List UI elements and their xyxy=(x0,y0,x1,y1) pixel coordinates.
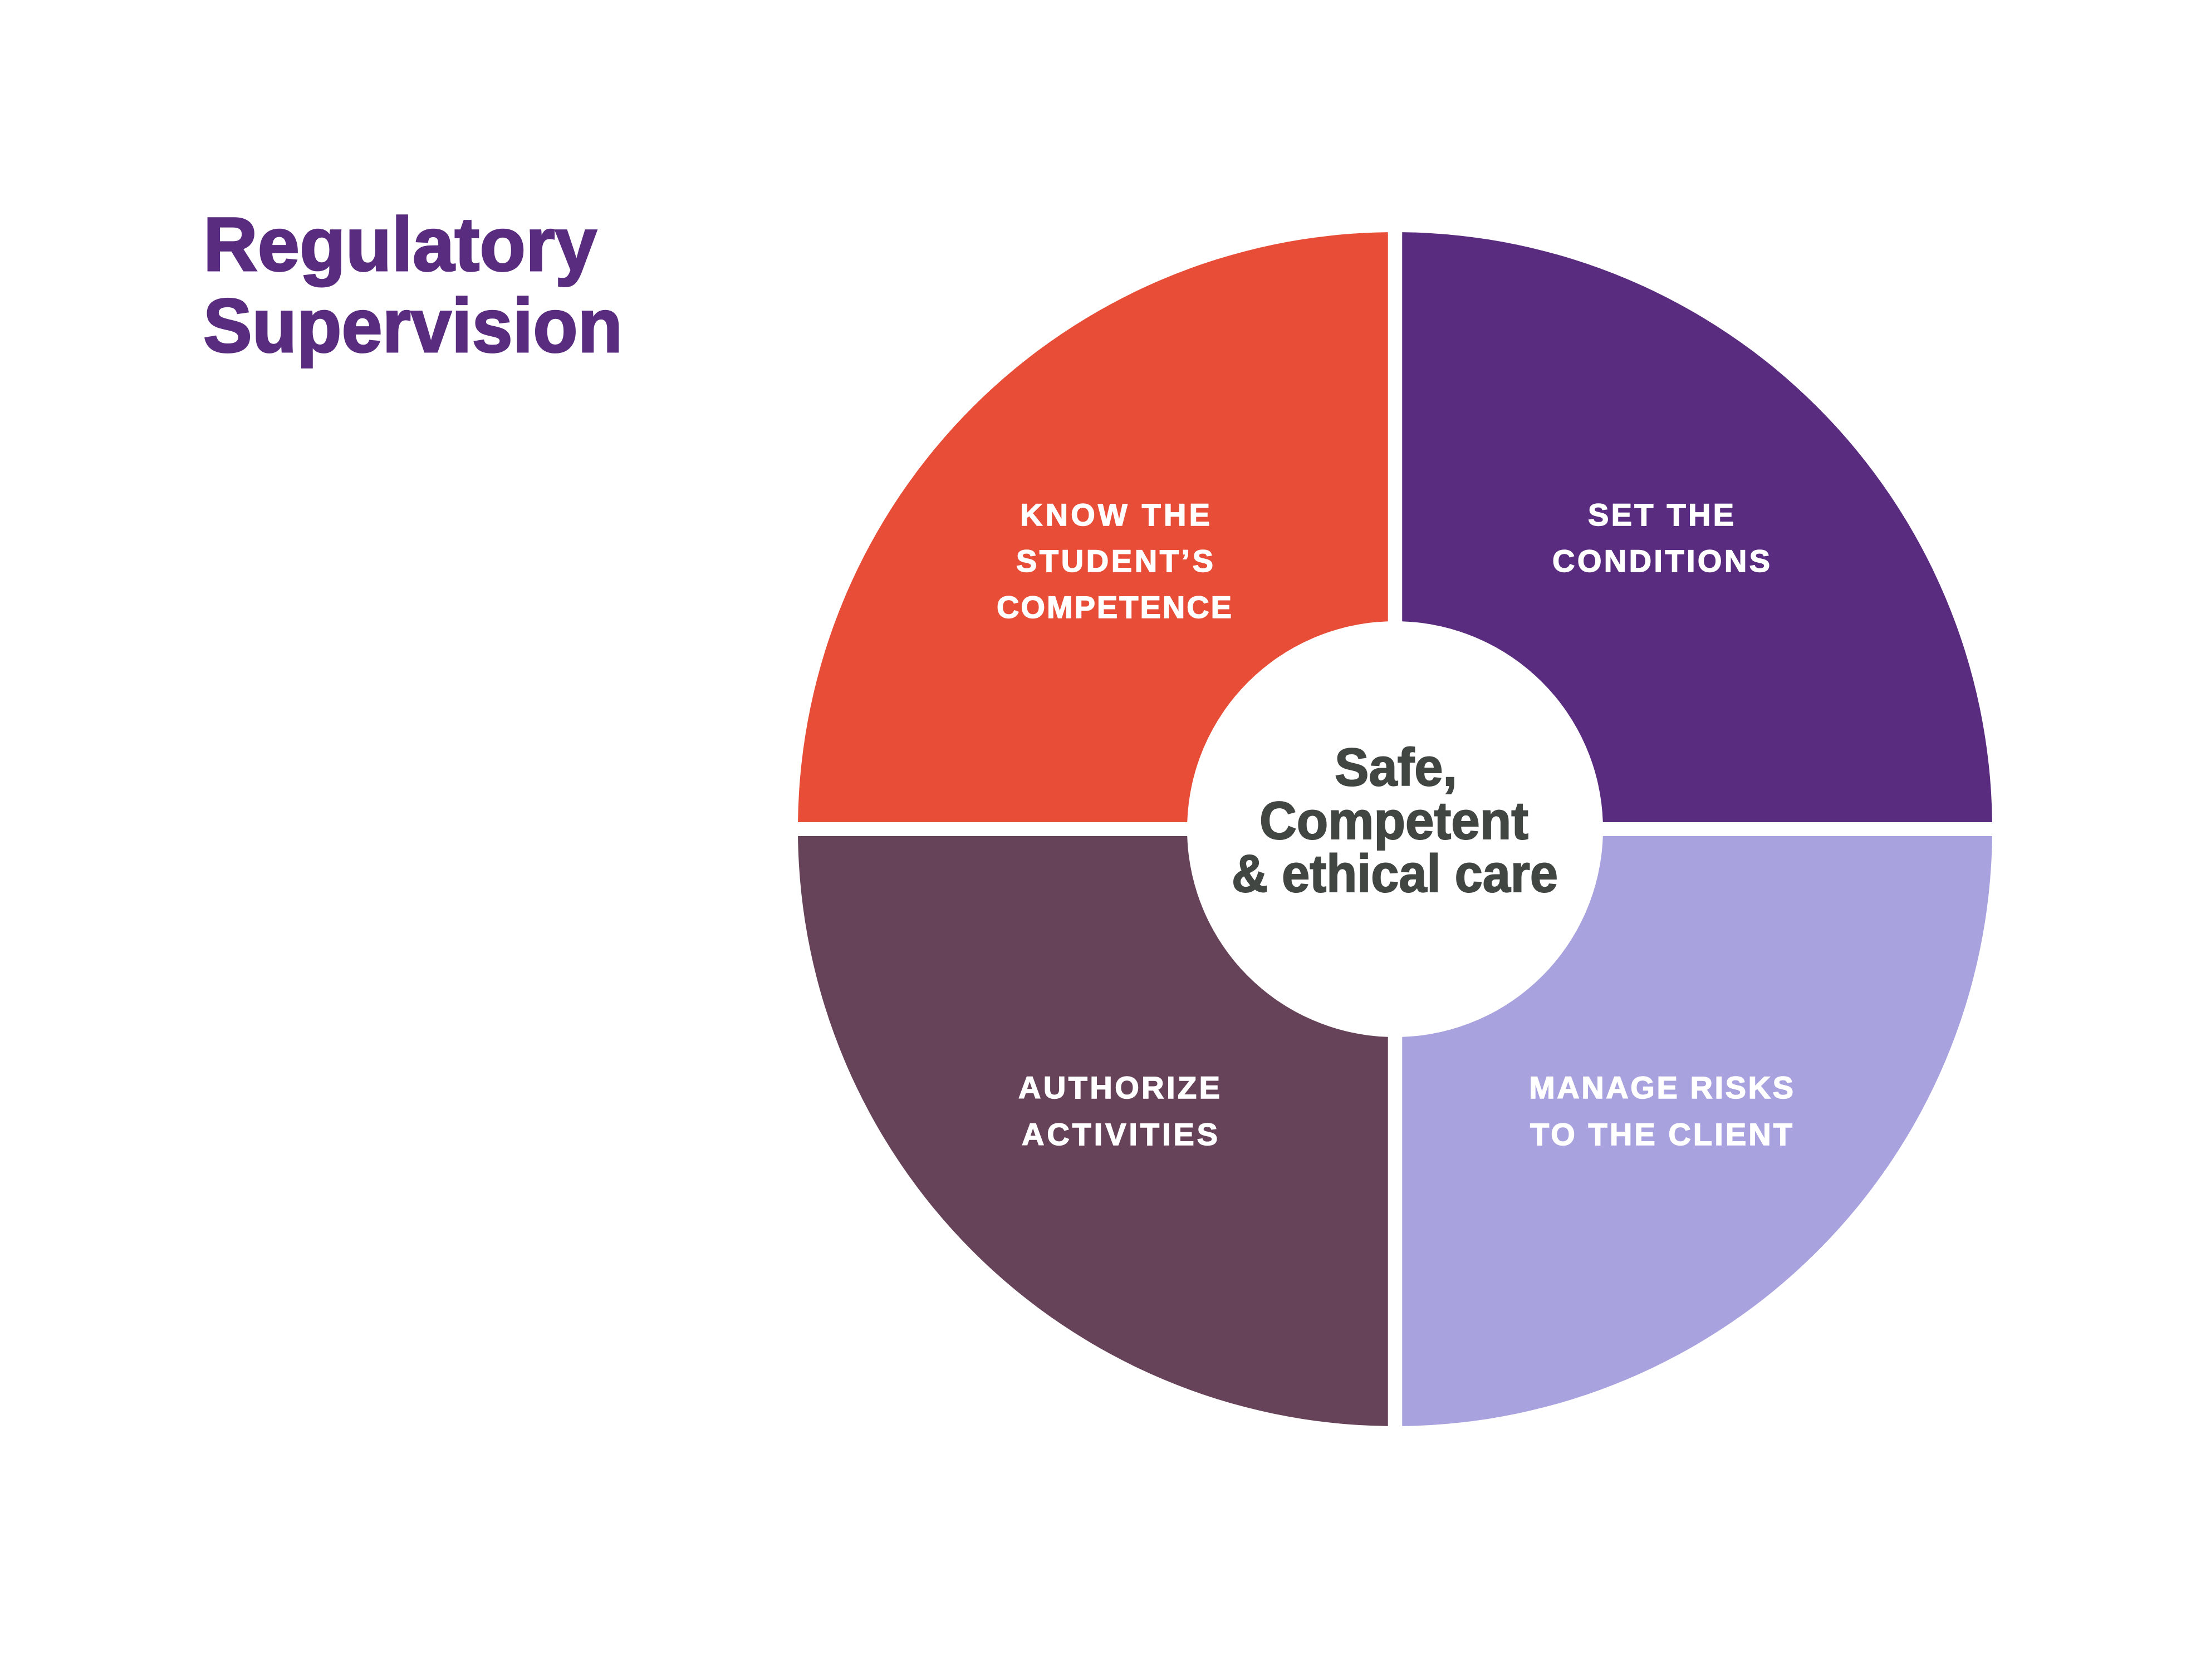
panel: authorize activities: ACTIVITIES xyxy=(1022,1117,1218,1152)
title: Regulatory xyxy=(203,202,597,287)
title: Supervision xyxy=(203,283,623,369)
center text: safe, competent and ethical care: Safe, xyxy=(1335,738,1457,797)
panel: know the student's competence: STUDENT’S xyxy=(1016,543,1213,578)
circular diagram xyxy=(798,232,1992,1426)
center text: safe, competent and ethical care xyxy=(1232,738,1558,903)
panel: manage risks to the client xyxy=(1402,836,1992,1426)
panel: authorize activities xyxy=(798,836,1388,1426)
panel: set the conditions: SET THE xyxy=(1588,497,1734,532)
center text: safe, competent and ethical care: Competent xyxy=(1259,791,1528,851)
panel: know the student's competence xyxy=(798,232,1388,822)
title xyxy=(203,202,623,369)
panel: know the student's competence: COMPETENCE xyxy=(997,590,1232,625)
center text: safe, competent and ethical care: & ethical care xyxy=(1232,844,1558,903)
panel: set the conditions xyxy=(1402,232,1992,822)
panel: know the student's competence: KNOW THE xyxy=(1020,497,1210,532)
panel: manage risks to the client: TO THE CLIENT xyxy=(1530,1117,1792,1152)
panel: manage risks to the client: MANAGE RISKS xyxy=(1529,1070,1793,1105)
panel: set the conditions: CONDITIONS xyxy=(1552,543,1770,578)
panel: authorize activities: AUTHORIZE xyxy=(1018,1070,1220,1105)
